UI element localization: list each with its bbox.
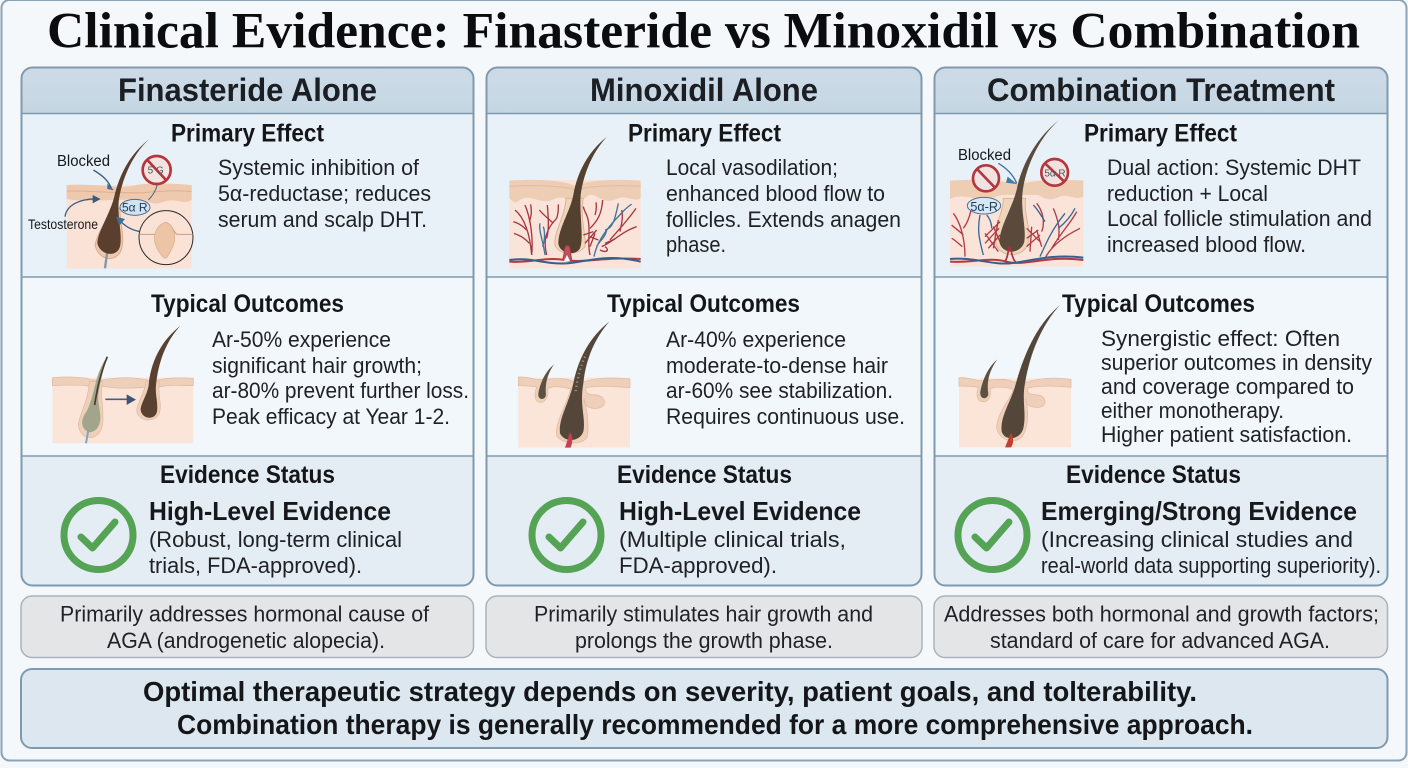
section: primary effect combination: increased blood flow.	[1107, 232, 1306, 257]
callout: minoxidil note: Primarily stimulates hair growth and	[534, 602, 873, 626]
section: typical outcomes combination: and coverage compared to	[1101, 374, 1354, 399]
section: primary effect minoxidil	[628, 120, 901, 257]
icon: follicle with blocked 5-alpha reductase: Testosterone	[28, 216, 98, 232]
section: evidence status minoxidil: (Multiple clinical trials,	[619, 527, 846, 552]
panel: conclusion	[21, 669, 1388, 748]
icon: combination dense hair	[959, 305, 1071, 447]
section: typical outcomes minoxidil: moderate-to-dense hair	[666, 353, 888, 378]
heading: minoxidil alone: Minoxidil Alone	[590, 72, 818, 108]
section: primary effect finasteride: serum and scalp DHT.	[218, 207, 427, 232]
icon: follicle with dilated blood vessels	[509, 137, 641, 268]
section: typical outcomes combination: Typical Outcomes	[1062, 290, 1255, 318]
section: evidence status combination	[1041, 461, 1381, 578]
section: primary effect minoxidil: Primary Effect	[628, 120, 782, 148]
section: primary effect combination: Dual action: Systemic DHT	[1107, 155, 1361, 180]
section: evidence status minoxidil: FDA-approved).	[619, 553, 777, 578]
section: typical outcomes combination	[1062, 290, 1373, 447]
section: primary effect combination	[1084, 120, 1372, 257]
icon: miniaturised and thickened hair	[518, 322, 630, 448]
section: primary effect finasteride: Primary Effect	[171, 120, 325, 148]
section: typical outcomes combination: Higher patient satisfaction.	[1101, 422, 1352, 447]
panel: minoxidil alone	[486, 68, 922, 586]
callout: combination note: standard of care for advanced AGA.	[990, 628, 1330, 653]
section: primary effect minoxidil: enhanced blood flow to	[666, 181, 885, 206]
callout: finasteride note	[21, 596, 474, 658]
icon: green check	[532, 500, 601, 570]
callout: combination note	[934, 596, 1388, 658]
section: evidence status minoxidil: Evidence Status	[617, 461, 792, 489]
icon: follicle with blocked 5-alpha reductase: 5α R	[122, 200, 148, 214]
icon: follicle with blocked 5-alpha reductase: Blocked	[57, 153, 110, 170]
section: typical outcomes finasteride: Typical Outcomes	[151, 290, 344, 318]
section: typical outcomes minoxidil	[607, 290, 905, 429]
section: primary effect finasteride: 5α-reductase; reduces	[218, 181, 431, 206]
icon: follicle with vessels and blocked enzyme: 5α R	[1044, 168, 1066, 179]
icon: follicle with vessels and blocked enzyme: Blocked	[958, 147, 1011, 164]
section: evidence status finasteride: High-Level Evidence	[149, 496, 391, 526]
section: evidence status combination: Emerging/Strong Evidence	[1041, 496, 1357, 526]
section: evidence status minoxidil	[617, 461, 861, 578]
section: typical outcomes minoxidil: Requires continuous use.	[666, 404, 905, 429]
section: typical outcomes minoxidil: Typical Outcomes	[607, 290, 800, 318]
section: primary effect minoxidil: Local vasodilation;	[666, 155, 838, 180]
icon: follicle with blocked 5-alpha reductase	[28, 139, 193, 268]
callout: combination note: Addresses both hormonal and growth factors;	[944, 602, 1379, 626]
section: evidence status finasteride: Evidence Status	[160, 461, 335, 489]
section: typical outcomes combination: Synergistic effect: Often	[1101, 326, 1340, 351]
panel: combination treatment	[934, 68, 1388, 586]
section: evidence status finasteride: trials, FDA-approved).	[149, 553, 362, 578]
heading: finasteride alone: Finasteride Alone	[118, 72, 377, 108]
section: primary effect finasteride: Systemic inhibition of	[218, 155, 420, 180]
section: primary effect combination: Local follicle stimulation and	[1107, 206, 1372, 231]
section: evidence status combination: Evidence Status	[1066, 461, 1241, 489]
section: evidence status minoxidil: High-Level Evidence	[619, 496, 861, 526]
icon: follicle with vessels and blocked enzyme: 5α-R	[970, 200, 998, 214]
panel: conclusion: Optimal therapeutic strategy depends on severity, patient goals, and tolterability.	[143, 676, 1197, 707]
section: typical outcomes combination: either monotherapy.	[1101, 398, 1284, 423]
section: typical outcomes minoxidil: Ar-40% experience	[666, 327, 846, 352]
icon: thin hair growing to thick hair	[52, 326, 193, 443]
panel: finasteride alone	[22, 68, 474, 586]
section: primary effect finasteride	[171, 120, 431, 232]
icon: follicle with blocked 5-alpha reductase: 5 G	[148, 166, 164, 177]
icon: green check	[958, 500, 1027, 570]
heading: combination treatment: Combination Treatment	[987, 72, 1335, 108]
section: primary effect combination: Primary Effect	[1084, 120, 1238, 148]
section: typical outcomes finasteride: Ar-50% experience	[212, 327, 391, 352]
callout: finasteride note: AGA (androgenetic alopecia).	[107, 628, 385, 653]
callout: minoxidil note	[486, 596, 922, 658]
section: primary effect combination: reduction + Local	[1107, 181, 1268, 206]
panel: conclusion: Combination therapy is generally recommended for a more comprehensive approach.	[177, 709, 1253, 740]
section: primary effect minoxidil: phase.	[666, 232, 726, 257]
callout: finasteride note: Primarily addresses hormonal cause of	[60, 602, 430, 626]
section: typical outcomes minoxidil: ar-60% see stabilization.	[666, 378, 893, 403]
icon: follicle with vessels and blocked enzyme	[950, 120, 1083, 267]
section: evidence status combination: (Increasing clinical studies and	[1041, 527, 1353, 552]
section: evidence status finasteride: (Robust, long-term clinical	[149, 527, 402, 552]
section: typical outcomes combination: superior outcomes in density	[1101, 350, 1373, 375]
section: primary effect minoxidil: follicles. Extends anagen	[666, 207, 901, 232]
section: typical outcomes finasteride: significant hair growth;	[212, 353, 422, 378]
section: typical outcomes finasteride: ar-80% prevent further loss.	[212, 378, 469, 403]
callout: minoxidil note: prolongs the growth phase.	[575, 628, 833, 653]
section: typical outcomes finasteride: Peak efficacy at Year 1-2.	[212, 404, 450, 429]
section: typical outcomes finasteride	[151, 290, 469, 429]
section: evidence status finasteride	[149, 461, 402, 578]
title: Clinical Evidence: Finasteride vs Minoxidil vs Combination	[47, 4, 1360, 60]
icon: green check	[64, 500, 133, 570]
